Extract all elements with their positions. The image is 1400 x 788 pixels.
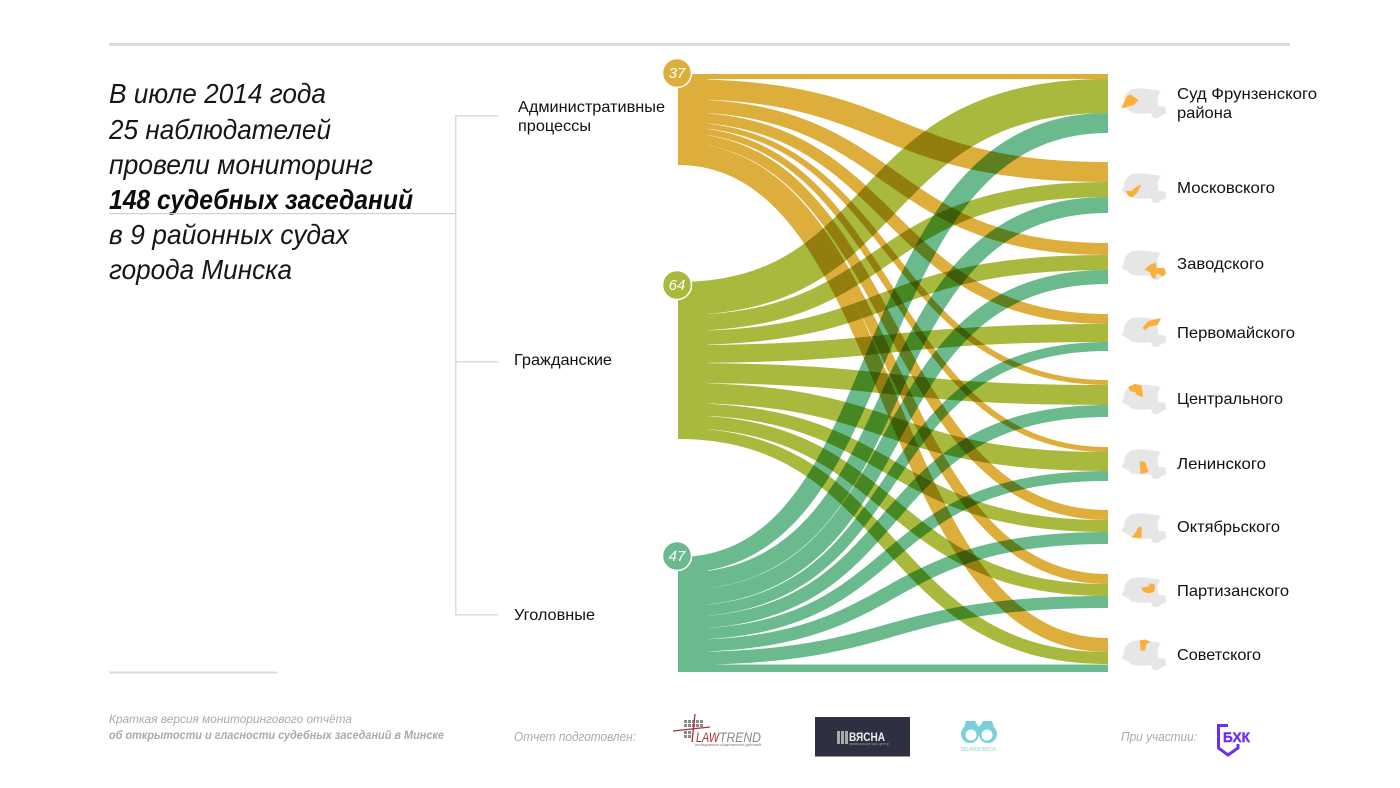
court labels: Московского xyxy=(1177,180,1275,197)
footer note: об открытости и гласности судебных заседаний в Минске xyxy=(109,728,444,742)
title: провели мониторинг xyxy=(109,149,373,180)
bracket connector xyxy=(109,115,498,616)
logo: LawTrend: LAW xyxy=(696,729,720,745)
category labels: Административные xyxy=(518,99,665,116)
map: Oktyabrsky xyxy=(1122,514,1166,543)
court labels: Суд Фрунзенского xyxy=(1177,86,1317,103)
badge: 64 xyxy=(662,270,692,300)
court labels: Октябрьского xyxy=(1177,519,1280,536)
badge: 64: 64 xyxy=(669,277,685,294)
sankey chart xyxy=(678,74,1108,672)
flows: administrative xyxy=(678,74,1108,652)
flows: civil xyxy=(678,79,1108,664)
title: в 9 районных судах xyxy=(109,219,350,250)
logo: Viasna xyxy=(815,717,910,756)
logo: LawTrend xyxy=(673,714,761,747)
logo: Belarus Watch: BELARUS WATCH xyxy=(961,747,996,753)
flows: criminal xyxy=(678,113,1108,672)
map: Zavodskoy xyxy=(1122,250,1166,280)
category labels: Гражданские xyxy=(514,352,612,369)
logo: Belarus Watch xyxy=(961,721,997,753)
badge: 47 xyxy=(662,542,692,570)
badge: 47: 47 xyxy=(669,548,686,565)
map: Moskovsky xyxy=(1122,174,1166,203)
court labels: Советского xyxy=(1177,647,1261,664)
map: Leninsky xyxy=(1122,450,1166,479)
map: Sovetsky xyxy=(1122,640,1166,670)
court labels: Заводского xyxy=(1177,256,1264,273)
title: 148 судебных заседаний xyxy=(109,184,413,215)
map: Partizansky xyxy=(1122,578,1166,607)
logo: BHC xyxy=(1217,725,1250,755)
badge: 37: 37 xyxy=(669,65,686,82)
court labels: района xyxy=(1177,105,1232,122)
map: Pervomaisky xyxy=(1122,318,1166,347)
footer note xyxy=(109,712,444,742)
logo: LawTrend: исследования общественных действий xyxy=(695,742,761,747)
logo: LawTrend: TREND xyxy=(719,729,761,745)
category labels: процессы xyxy=(518,118,591,135)
logo: BHC: БХК xyxy=(1223,729,1250,745)
court labels: Ленинского xyxy=(1177,456,1266,473)
court labels: Партизанского xyxy=(1177,583,1289,600)
credit label: Отчет подготовлен: xyxy=(514,729,636,744)
court labels: Первомайского xyxy=(1177,325,1295,342)
map: Frunzensky xyxy=(1122,88,1166,118)
sponsor label: При участии: xyxy=(1121,729,1197,744)
title xyxy=(108,78,413,285)
badge: 37 xyxy=(662,58,692,88)
map: Tsentralny xyxy=(1122,384,1166,414)
logo: Viasna: ВЯСНА xyxy=(849,730,885,744)
category labels xyxy=(514,99,665,624)
court labels: Центрального xyxy=(1177,391,1283,408)
logo: Viasna: правозащитный центр xyxy=(849,742,889,746)
title: 25 наблюдателей xyxy=(108,114,331,145)
title: города Минска xyxy=(109,254,292,285)
court labels xyxy=(1177,86,1317,664)
category labels: Уголовные xyxy=(514,607,595,624)
footer note: Краткая версия мониторингового отчёта xyxy=(109,712,352,726)
title: В июле 2014 года xyxy=(109,78,326,109)
